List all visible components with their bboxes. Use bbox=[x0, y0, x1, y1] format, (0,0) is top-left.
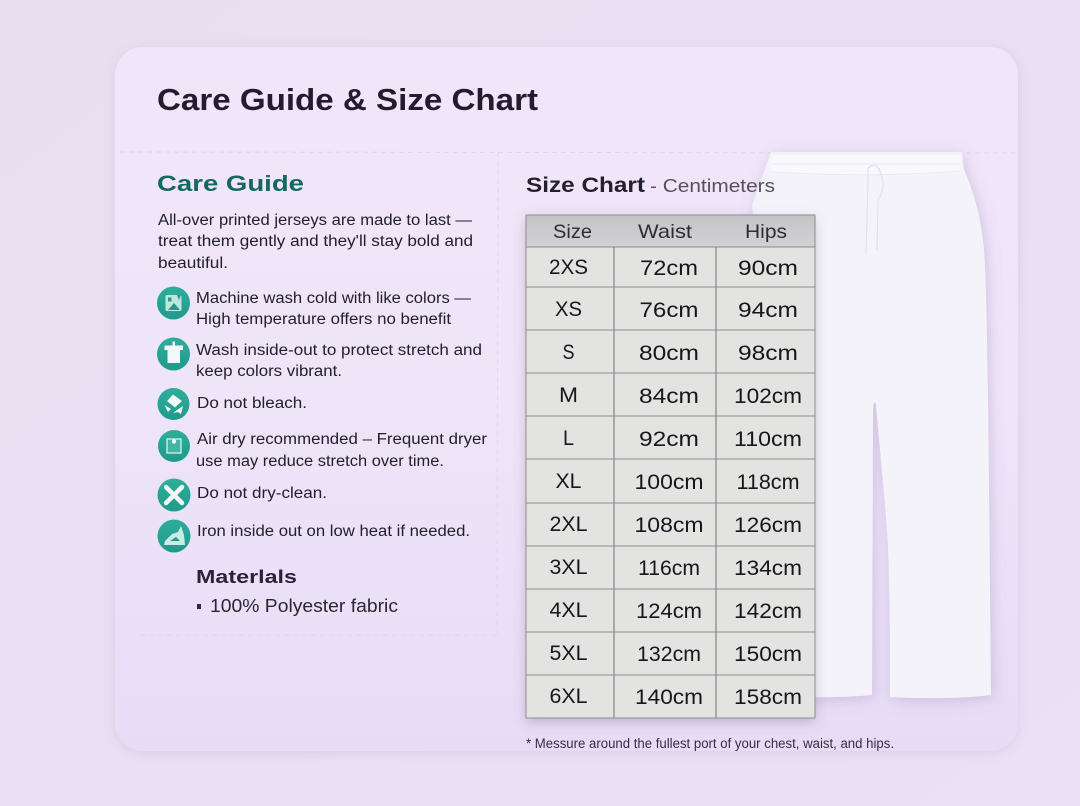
table rows: 94cm bbox=[738, 299, 798, 322]
table rows: 90cm bbox=[738, 257, 798, 280]
size chart heading: - Centimeters bbox=[650, 175, 775, 196]
table rows: 110cm bbox=[734, 428, 802, 451]
table header: Waist bbox=[638, 221, 693, 243]
care item: no dry-clean: Do not dry-clean. bbox=[197, 485, 327, 502]
table rows: 118cm bbox=[736, 471, 800, 494]
intro text: All-over printed jerseys are made to last — bbox=[158, 212, 473, 229]
table rows: 5XL bbox=[550, 642, 588, 665]
table rows: M bbox=[559, 384, 578, 407]
table rows: 2XL bbox=[550, 513, 588, 536]
table rows: S bbox=[562, 341, 574, 364]
table rows: 126cm bbox=[734, 514, 802, 537]
intro text: beautiful. bbox=[158, 255, 228, 272]
table rows: L bbox=[563, 427, 574, 450]
table rows: 6XL bbox=[550, 685, 588, 708]
table rows: 116cm bbox=[638, 557, 700, 580]
table header bbox=[526, 215, 815, 247]
care item: inside-out: Wash inside-out to protect stretch and bbox=[196, 342, 482, 359]
icon: iron bbox=[158, 520, 190, 552]
care item: no bleach: Do not bleach. bbox=[197, 395, 307, 412]
table rows: 92cm bbox=[639, 428, 699, 451]
materials: 100% Polyester fabric bbox=[210, 596, 398, 616]
intro text: treat them gently and they'll stay bold and bbox=[158, 233, 473, 250]
care item: machine wash: High temperature offers no benefit bbox=[196, 311, 452, 328]
table rows: 72cm bbox=[640, 257, 698, 280]
table rows: 80cm bbox=[639, 342, 699, 365]
table rows bbox=[549, 256, 802, 709]
table rows: XL bbox=[556, 470, 582, 493]
table rows: 140cm bbox=[635, 686, 703, 709]
table rows: 3XL bbox=[550, 556, 588, 579]
panel: care guide bbox=[157, 171, 487, 616]
care item: machine wash: Machine wash cold with like colors — bbox=[196, 290, 472, 307]
illustration: white pants bbox=[752, 152, 991, 698]
size chart heading: Size Chart bbox=[526, 174, 645, 197]
icon: air dry bbox=[158, 430, 190, 462]
table rows: 2XS bbox=[549, 256, 588, 279]
table rows: 76cm bbox=[640, 299, 698, 322]
intro text bbox=[158, 212, 473, 272]
table header: Hips bbox=[745, 221, 787, 243]
title: Care Guide & Size Chart bbox=[157, 82, 538, 117]
materials bbox=[196, 566, 398, 616]
icon: cross bbox=[158, 478, 190, 512]
table rows: 108cm bbox=[634, 514, 704, 537]
table rows: 100cm bbox=[634, 471, 704, 494]
heading: care guide: Care Guide bbox=[157, 171, 304, 196]
table rows: 142cm bbox=[734, 600, 802, 623]
materials: Materlals bbox=[196, 566, 297, 587]
care item: iron bbox=[158, 520, 470, 552]
size chart heading bbox=[526, 174, 775, 197]
care item: inside-out bbox=[157, 338, 482, 380]
icon: washing bbox=[157, 286, 190, 320]
care item: machine wash bbox=[157, 286, 472, 328]
care item: no bleach bbox=[158, 388, 307, 420]
care item: air dry: use may reduce stretch over time. bbox=[196, 453, 444, 470]
care item: air dry: Air dry recommended – Frequent dryer bbox=[197, 431, 487, 448]
table rows: XS bbox=[555, 298, 582, 321]
table rows: 4XL bbox=[550, 599, 588, 622]
size table bbox=[526, 215, 815, 718]
care item: no dry-clean bbox=[158, 478, 327, 512]
care item: air dry bbox=[158, 430, 487, 470]
care item: iron: Iron inside out on low heat if needed. bbox=[197, 523, 470, 540]
table rows: 84cm bbox=[639, 385, 699, 408]
panel: main card bbox=[115, 47, 1018, 751]
icon: garment bbox=[157, 338, 190, 370]
table rows: 102cm bbox=[734, 385, 802, 408]
icon: no bleach bbox=[158, 388, 190, 420]
table header: Size bbox=[553, 221, 592, 243]
table rows: 150cm bbox=[734, 643, 802, 666]
table rows: 132cm bbox=[637, 643, 701, 666]
table rows: 158cm bbox=[734, 686, 802, 709]
table rows: 134cm bbox=[734, 557, 802, 580]
table rows: 98cm bbox=[738, 342, 798, 365]
footnote: * Messure around the fullest port of your chest, waist, and hips. bbox=[526, 736, 894, 751]
table rows: 124cm bbox=[636, 600, 702, 623]
care item: inside-out: keep colors vibrant. bbox=[196, 363, 342, 380]
